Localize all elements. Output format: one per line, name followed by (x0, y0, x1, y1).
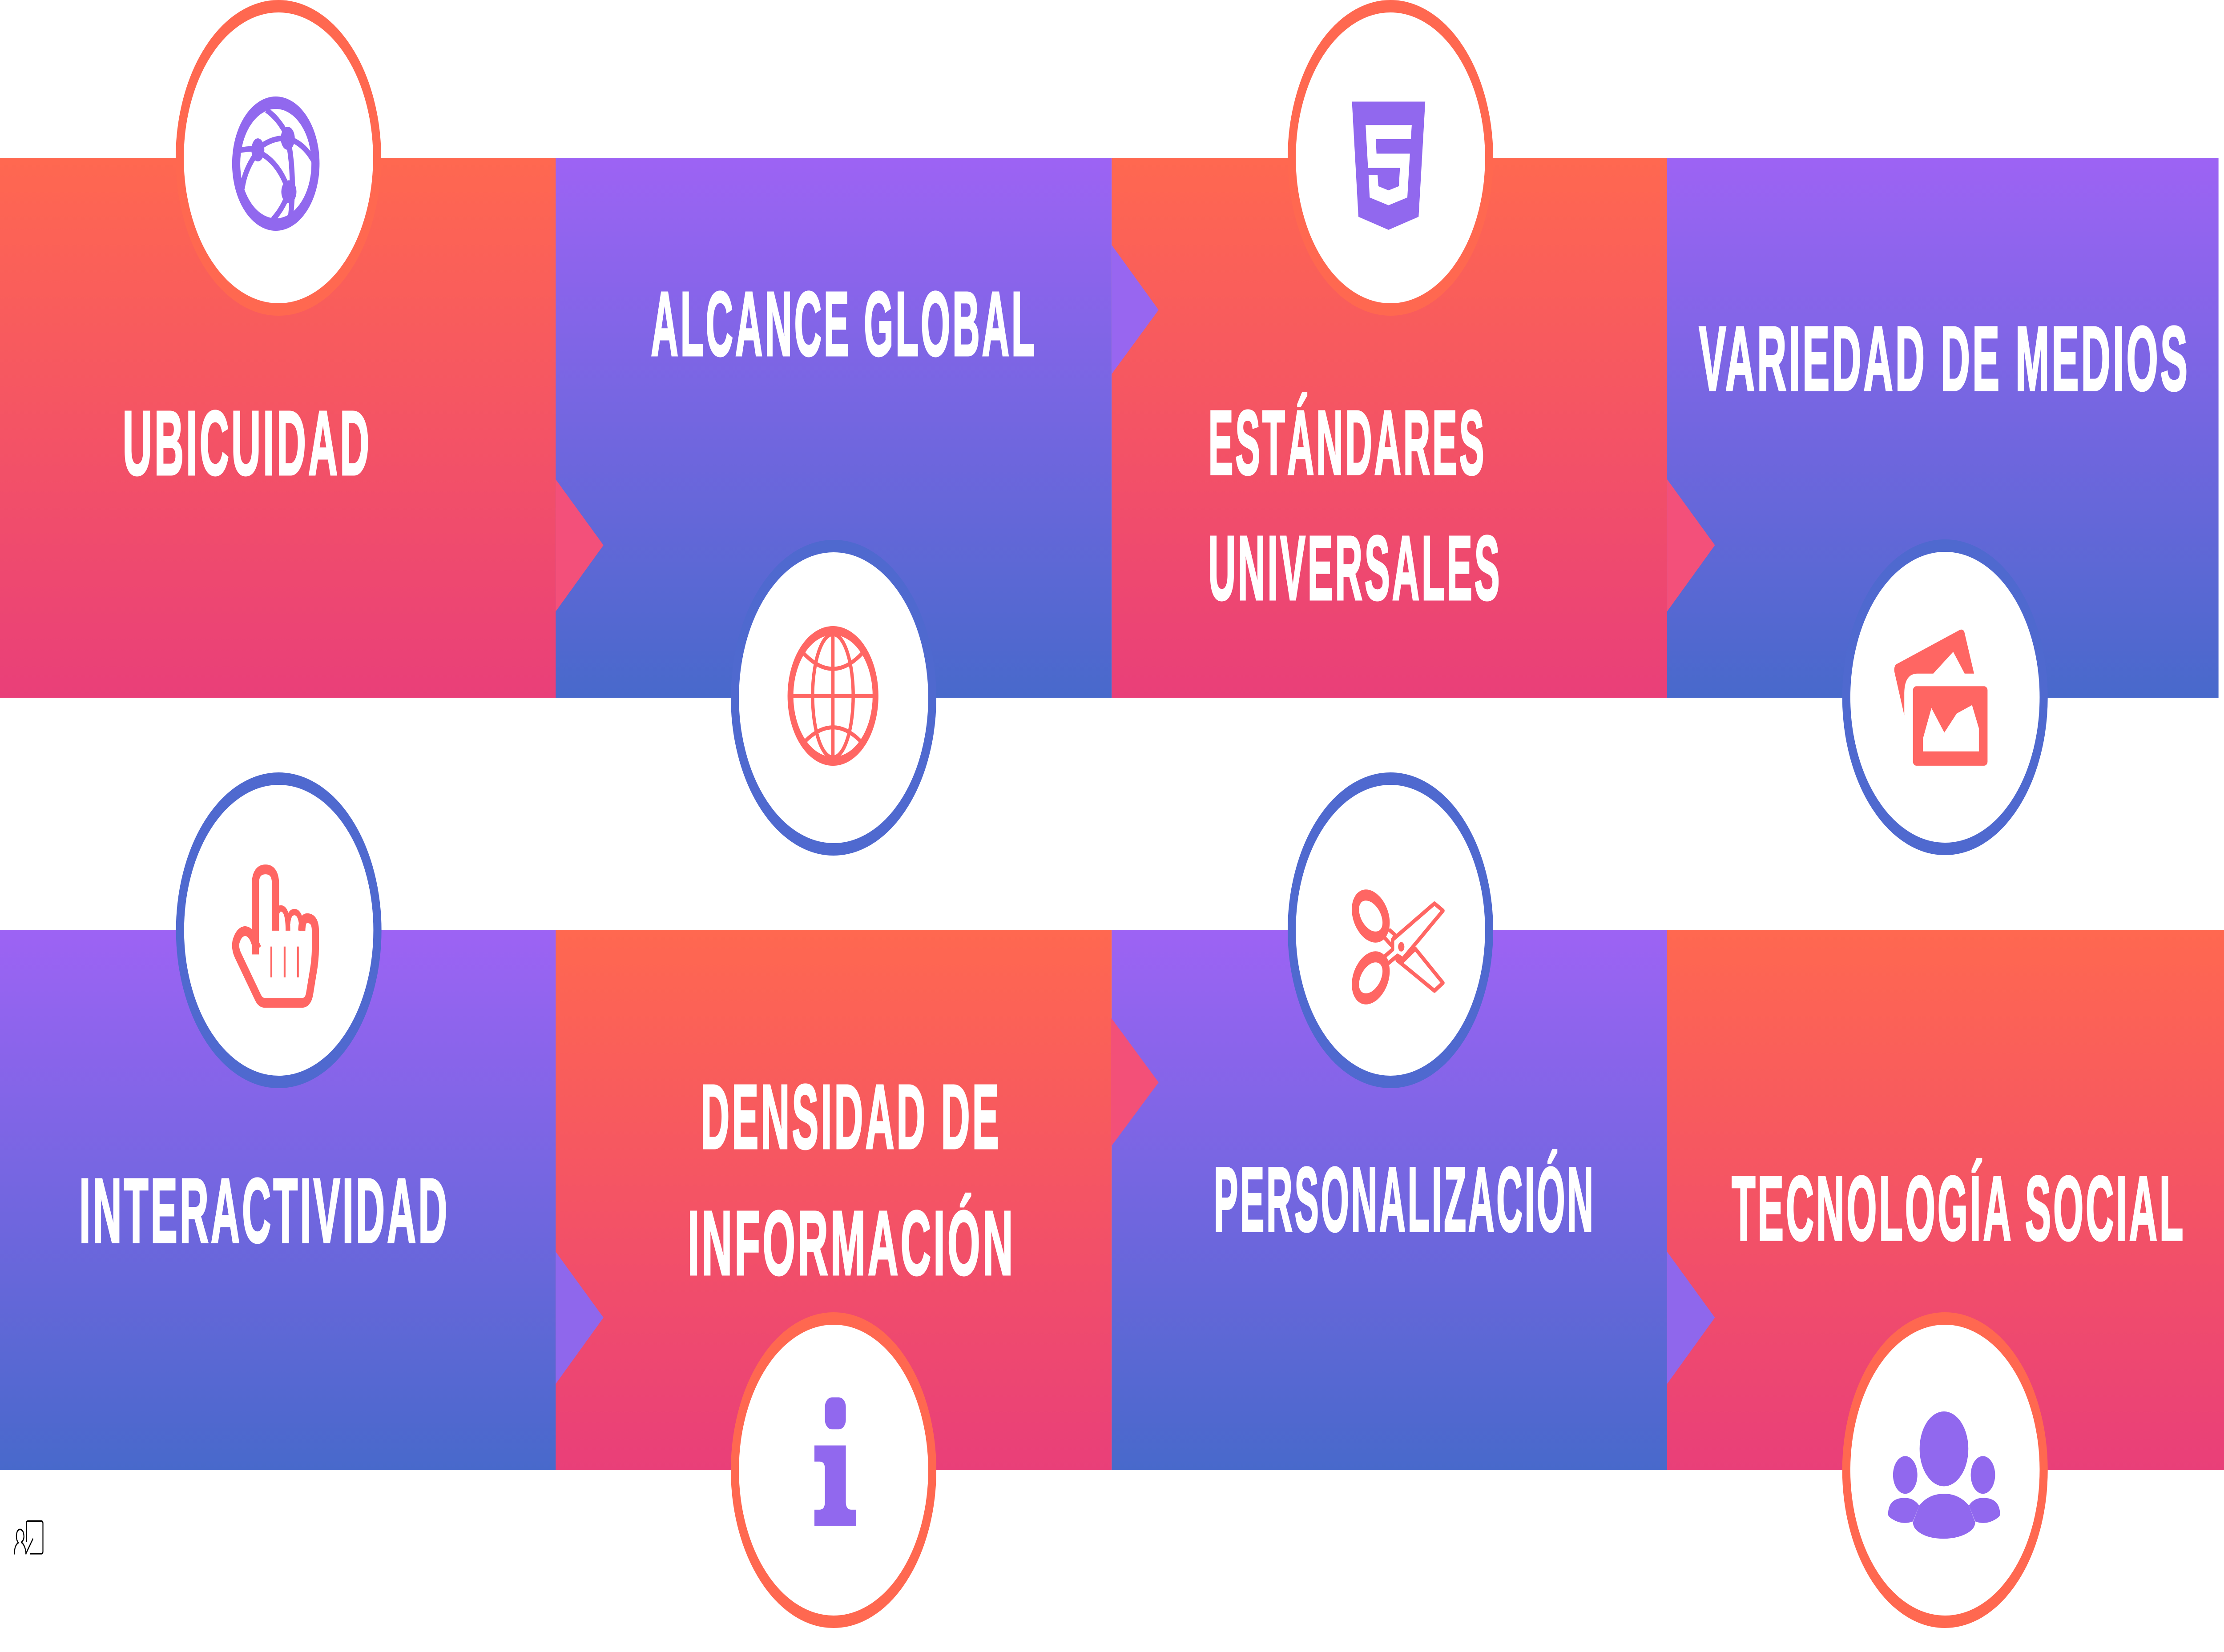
panel: Estándares universales (1112, 158, 1668, 698)
badge: network globe (180, 6, 377, 309)
icon: presenter at board (14, 1521, 43, 1554)
arrow: Alcance global to Estándares (1112, 245, 1159, 374)
panel: Tecnología social (1667, 930, 2224, 1470)
arrow: Densidad to Personalización (1111, 1017, 1159, 1147)
panel: Personalización (1112, 930, 1668, 1470)
badge: photos (1846, 546, 2044, 849)
heading: ESTÁNDARES UNIVERSALES (1209, 391, 1502, 619)
icon: network globe (236, 103, 315, 225)
badge: scissors (1292, 779, 1489, 1082)
panel: Alcance global (556, 158, 1112, 698)
heading: ESTÁNDARES UNIVERSALES: UNIVERSALES (1209, 517, 1502, 619)
badge: world globe (735, 546, 932, 849)
badge: HTML5 shield (1292, 6, 1489, 309)
arrow: Personalización to Tecnología social (1667, 1252, 1715, 1384)
icon: photos (1894, 630, 1987, 766)
heading: UBICUIDAD: UBICUIDAD (123, 392, 372, 494)
badge: pointing hand (180, 779, 378, 1082)
icon: pointing hand (236, 869, 315, 1003)
panel: Densidad de información (556, 930, 1112, 1470)
heading: DENSIDAD DE INFORMACIÓN (688, 1065, 1015, 1294)
heading: ESTÁNDARES UNIVERSALES: ESTÁNDARES (1209, 391, 1486, 494)
icon: people (1888, 1411, 2000, 1539)
icon: HTML5 shield (1352, 102, 1425, 230)
arrow: Estándares to Variedad de medios (1667, 479, 1715, 611)
heading: DENSIDAD DE INFORMACIÓN: DENSIDAD DE (701, 1065, 1001, 1168)
icon: scissors (1350, 886, 1443, 1008)
heading: PERSONALIZACIÓN: PERSONALIZACIÓN (1214, 1148, 1595, 1250)
heading: DENSIDAD DE INFORMACIÓN: INFORMACIÓN (688, 1192, 1015, 1294)
panel: Interactividad (0, 930, 556, 1470)
badge: information (735, 1318, 932, 1622)
panel: Ubicuidad (0, 158, 556, 698)
badge: people (1846, 1318, 2044, 1622)
icon: world globe (790, 630, 875, 761)
panel: Variedad de medios (1667, 158, 2219, 698)
heading: INTERACTIVIDAD: INTERACTIVIDAD (79, 1159, 450, 1262)
arrow: Interactividad to Densidad (556, 1252, 604, 1384)
arrow: Ubicuidad to Alcance global (556, 479, 604, 611)
heading: ALCANCE GLOBAL: ALCANCE GLOBAL (651, 273, 1037, 375)
icon: information (814, 1397, 856, 1526)
